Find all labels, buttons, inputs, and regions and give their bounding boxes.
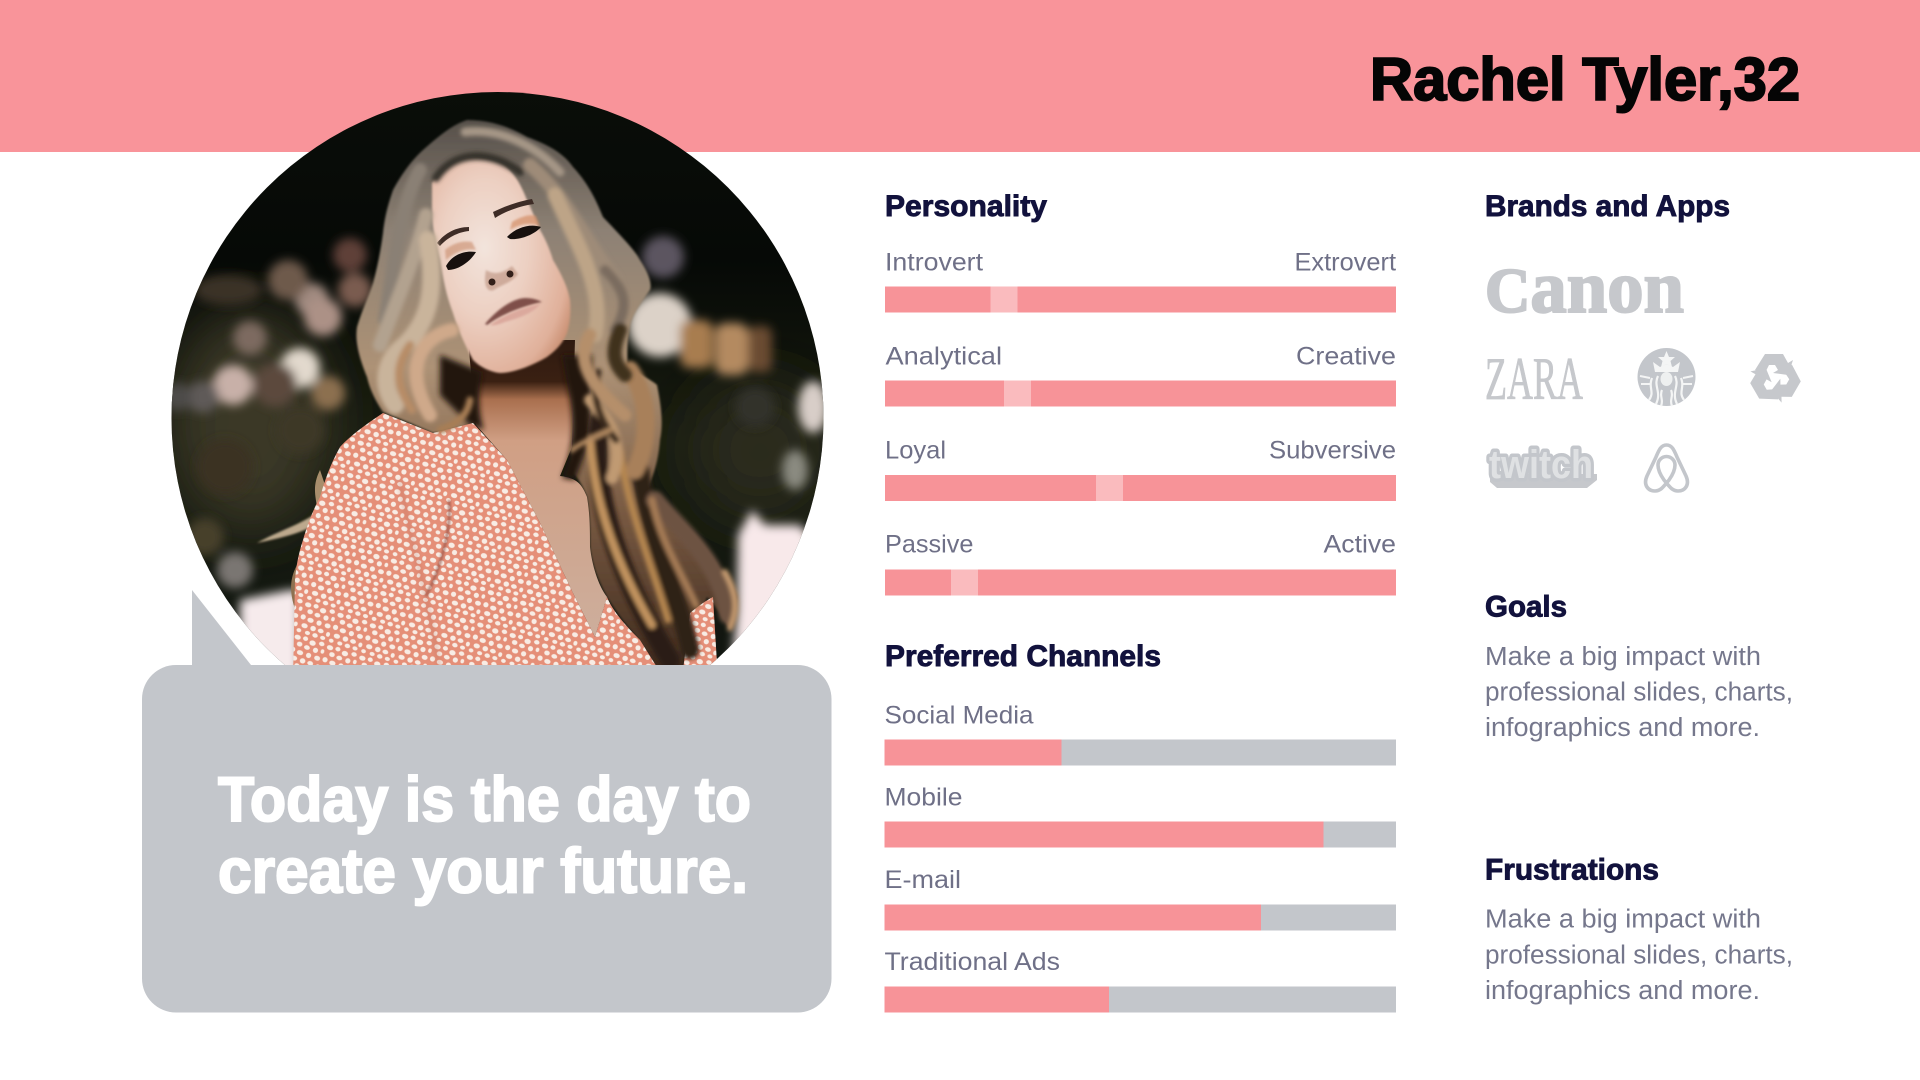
shadow under hair beside neck [440, 355, 484, 430]
neck and chest [468, 340, 607, 637]
right eye [507, 226, 541, 239]
frustrations text: Make a big impact with [1485, 906, 1761, 934]
bubble tail [192, 590, 251, 680]
frustrations text [1485, 906, 1793, 1005]
left brow [437, 227, 469, 246]
slider: passive to active [885, 530, 1396, 596]
right brow [493, 199, 534, 218]
heading: brands and apps: Brands and Apps [1485, 190, 1730, 223]
slider: loyal to subversive: Loyal [885, 436, 946, 464]
bar: mobile [884, 784, 1396, 848]
quote text: Today is the day to [218, 765, 751, 835]
bar: e-mail: E-mail [884, 866, 961, 894]
bar: e-mail [884, 866, 1396, 930]
panel: preferred channels [884, 640, 1396, 1012]
heading: frustrations: Frustrations [1485, 854, 1659, 886]
frustrations text: professional slides, charts, [1485, 942, 1793, 970]
slider: analytical to creative [885, 342, 1396, 406]
heading: goals: Goals [1485, 590, 1567, 624]
lips [485, 298, 542, 325]
quote speech bubble [142, 590, 832, 1012]
bar: traditional ads: Traditional Ads [884, 948, 1060, 976]
logo: starbucks [1638, 348, 1696, 406]
heading: preferred channels: Preferred Channels [885, 640, 1161, 673]
bar: social media: Social Media [884, 702, 1034, 730]
goals text: infographics and more. [1485, 714, 1760, 742]
nose [485, 266, 518, 291]
slider: introvert to extrovert: Extrovert [1294, 248, 1396, 276]
eye shadow warm [510, 215, 540, 230]
goals text [1485, 643, 1793, 742]
blouse [293, 413, 718, 680]
bar: traditional ads [884, 948, 1396, 1012]
quote text: create your future. [218, 836, 748, 906]
left hair wisp [257, 470, 324, 608]
panel: goals [1485, 590, 1793, 742]
slider: introvert to extrovert [885, 248, 1396, 312]
bar: mobile: Mobile [884, 784, 962, 812]
bubble body [142, 665, 832, 1012]
panel: brands and apps [1485, 190, 1806, 491]
slider: analytical to creative: Analytical [886, 342, 1002, 370]
panel: frustrations [1485, 854, 1793, 1005]
heading: personality: Personality [885, 190, 1047, 223]
left eye [446, 252, 476, 270]
logo: canon: Canon [1485, 247, 1684, 329]
logo: recycling [1745, 354, 1806, 407]
lower hair strands on right [572, 370, 735, 660]
background foliage bokeh [164, 236, 830, 690]
slider: passive to active: Active [1324, 530, 1396, 558]
logo: twitch: twitch [1489, 443, 1593, 487]
slider: passive to active: Passive [885, 530, 974, 558]
slider: loyal to subversive: Subversive [1269, 436, 1396, 464]
logo: airbnb [1646, 445, 1687, 491]
goals text: professional slides, charts, [1485, 678, 1793, 706]
blouse folds [426, 500, 449, 596]
quote text [218, 765, 751, 906]
slider: introvert to extrovert: Introvert [885, 248, 983, 276]
hair main silhouette [356, 120, 737, 670]
frustrations text: infographics and more. [1485, 977, 1760, 1005]
goals text: Make a big impact with [1485, 643, 1761, 671]
title: Rachel Tyler,32 [1370, 46, 1800, 113]
portrait photo [160, 80, 840, 690]
face [432, 157, 570, 373]
logo: zara: ZARA [1485, 346, 1583, 412]
slider: loyal to subversive [885, 436, 1396, 501]
hair strands over head [380, 131, 625, 430]
bar: social media [884, 702, 1396, 766]
header band [0, 0, 1920, 152]
panel: personality [885, 190, 1396, 596]
slider: analytical to creative: Creative [1296, 342, 1396, 370]
